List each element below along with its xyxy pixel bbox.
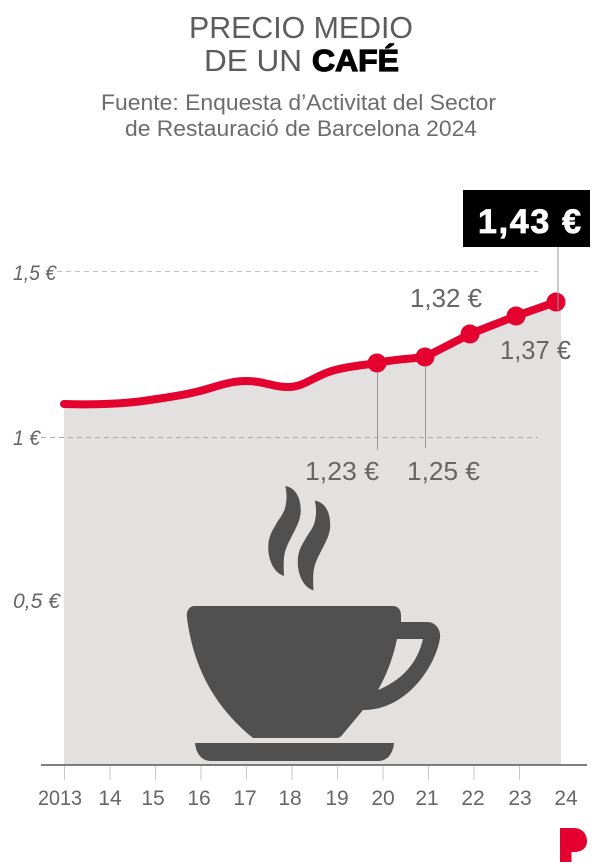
- x axis year labels: 15: [141, 787, 165, 810]
- x axis year labels: 20: [371, 787, 395, 810]
- data labels: [305, 283, 572, 486]
- x axis year labels: 17: [233, 787, 257, 810]
- title: [189, 10, 413, 78]
- icon: saucer: [195, 743, 394, 761]
- callout: latest price: [463, 190, 590, 247]
- y axis labels: 1 €: [13, 427, 41, 450]
- x axis year labels: [38, 787, 578, 810]
- icon: coffee cup: [187, 486, 440, 761]
- title: DE UN: [204, 43, 302, 78]
- title: CAFÉ: [312, 43, 399, 78]
- gridlines: [41, 272, 538, 438]
- icon: steam: [268, 486, 330, 590]
- y axis labels: [13, 262, 61, 613]
- x axis year labels: 23: [508, 787, 532, 810]
- price line: [64, 302, 556, 404]
- y axis labels: 0,5 €: [13, 590, 61, 613]
- data labels: 1,23 €: [305, 456, 380, 486]
- data labels: 1,32 €: [410, 283, 483, 313]
- x axis year labels: 22: [461, 787, 485, 810]
- x axis year labels: 19: [325, 787, 349, 810]
- logo: [560, 828, 587, 862]
- data labels: 1,25 €: [407, 456, 481, 486]
- x axis year labels: 14: [98, 787, 122, 810]
- x axis year labels: 18: [278, 787, 302, 810]
- callout: latest price: 1,43 €: [478, 203, 581, 241]
- subtitle: source: de Restauració de Barcelona 2024: [125, 116, 477, 141]
- data labels: 1,37 €: [500, 335, 572, 365]
- x axis year labels: 21: [415, 787, 439, 810]
- x axis year labels: 24: [554, 787, 578, 810]
- icon: cup body and handle: [187, 606, 440, 738]
- y axis labels: 1,5 €: [13, 262, 57, 285]
- area under the line: [64, 302, 561, 765]
- subtitle: source: [101, 90, 496, 141]
- x axis: [41, 765, 587, 780]
- title: PRECIO MEDIO: [189, 10, 413, 45]
- x axis year labels: 2013: [38, 787, 82, 810]
- data points: [368, 292, 566, 372]
- leader lines: [378, 247, 558, 450]
- subtitle: source: Fuente: Enquesta d’Activitat del Sector: [101, 90, 496, 115]
- x axis year labels: 16: [187, 787, 211, 810]
